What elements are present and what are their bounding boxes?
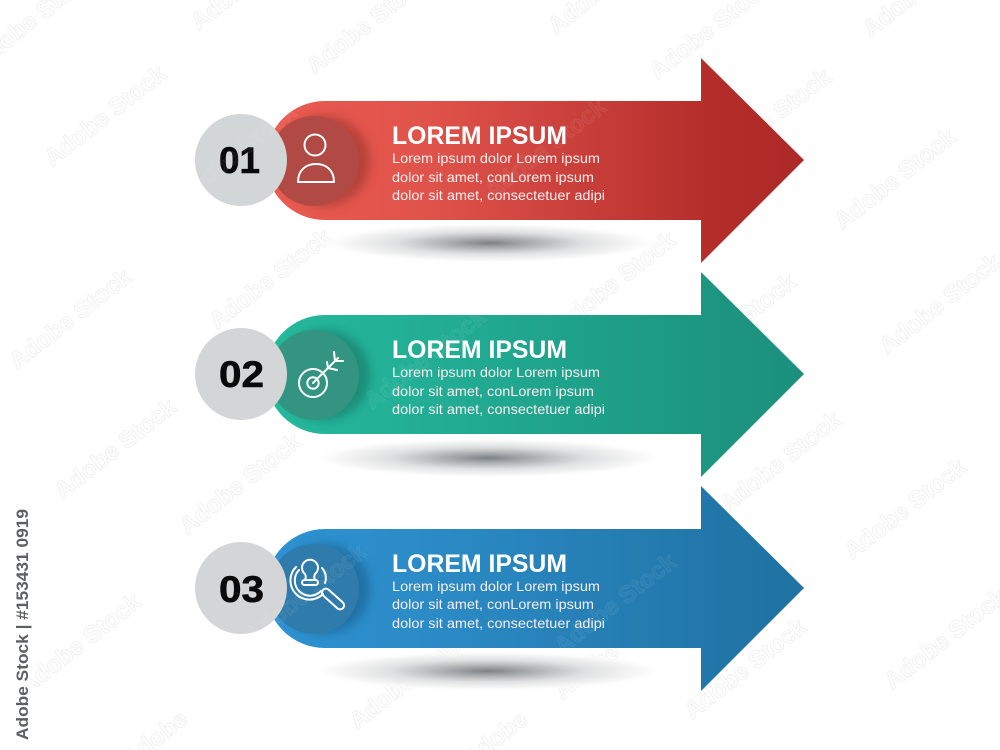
text block 03 xyxy=(392,578,605,631)
number badge 02 xyxy=(195,328,287,420)
arrow shape 01 xyxy=(266,58,804,263)
background watermarks: Adobe Stock xyxy=(839,453,972,565)
shadow under arrow 2 xyxy=(310,438,666,478)
watermarks over arrows: Adobe Stock xyxy=(479,93,612,205)
background watermarks: Adobe Stock xyxy=(549,593,682,705)
text block 03: Lorem ipsum dolor Lorem ipsum xyxy=(392,578,600,594)
background watermarks: Adobe Stock xyxy=(204,223,337,335)
text block 01: dolor sit amet, conLorem ipsum xyxy=(392,169,594,185)
background watermarks: Adobe Stock xyxy=(714,406,847,518)
background watermarks: Adobe Stock xyxy=(829,123,962,235)
text block 02: dolor sit amet, conLorem ipsum xyxy=(392,383,594,399)
number badge 01: 01 xyxy=(219,140,260,181)
text block 01: Lorem ipsum dolor Lorem ipsum xyxy=(392,150,600,166)
watermarks over arrows: Adobe Stock xyxy=(239,538,372,650)
icon disc 03 xyxy=(269,544,370,634)
background watermarks: Adobe Stock xyxy=(679,613,812,725)
background watermarks: Adobe Stock xyxy=(14,588,147,700)
text block 03: dolor sit amet, conLorem ipsum xyxy=(392,596,594,612)
number badge 03: 03 xyxy=(219,569,264,610)
background watermarks: Adobe Stock xyxy=(174,428,307,540)
icon disc 01 xyxy=(269,116,370,206)
background watermarks: Adobe Stock xyxy=(669,268,802,380)
icon: person xyxy=(298,134,334,182)
arrow shape 03 xyxy=(266,486,804,691)
watermarks over arrows xyxy=(169,93,682,660)
shadow under arrow 3 xyxy=(310,651,666,691)
background watermarks: Adobe Stock xyxy=(344,623,477,735)
watermarks over arrows: Adobe Stock xyxy=(359,303,492,415)
vertical stock id caption: Adobe Stock | #153431 0919 xyxy=(13,509,32,740)
background watermarks: Adobe Stock xyxy=(39,60,172,172)
number badge 02: 02 xyxy=(219,354,264,395)
text block 02 xyxy=(392,364,605,417)
text block 03: dolor sit amet, consectetuer adipi xyxy=(392,615,605,631)
watermarks over arrows: Adobe Stock xyxy=(549,548,682,660)
panel: step 03 blue arrow xyxy=(195,486,804,691)
background watermarks: Adobe Stock xyxy=(704,63,837,175)
background watermarks: Adobe Stock xyxy=(49,393,182,505)
arrow shape 02 xyxy=(266,272,804,477)
panel: step 01 red arrow xyxy=(195,58,804,263)
text block 01: dolor sit amet, consectetuer adipi xyxy=(392,187,605,203)
text block 02: dolor sit amet, consectetuer adipi xyxy=(392,401,605,417)
number badge 03 xyxy=(195,542,287,634)
text block 02: Lorem ipsum dolor Lorem ipsum xyxy=(392,364,600,380)
icon: magnifier with stamp xyxy=(290,560,346,611)
heading 01: LOREM IPSUM xyxy=(392,122,567,150)
watermarks over arrows: Adobe Stock xyxy=(169,98,302,210)
background watermarks: Adobe Stock xyxy=(549,226,682,338)
heading 03: LOREM IPSUM xyxy=(392,550,567,578)
number badge 01 xyxy=(195,114,287,206)
icon: target with arrow xyxy=(299,352,343,397)
shadow under arrow 1 xyxy=(320,223,660,263)
panel: step 02 teal arrow xyxy=(195,272,804,477)
icon disc 02 xyxy=(269,330,370,420)
text block 01 xyxy=(392,150,605,203)
background watermarks: Adobe Stock xyxy=(4,263,137,375)
heading 02: LOREM IPSUM xyxy=(392,336,567,364)
